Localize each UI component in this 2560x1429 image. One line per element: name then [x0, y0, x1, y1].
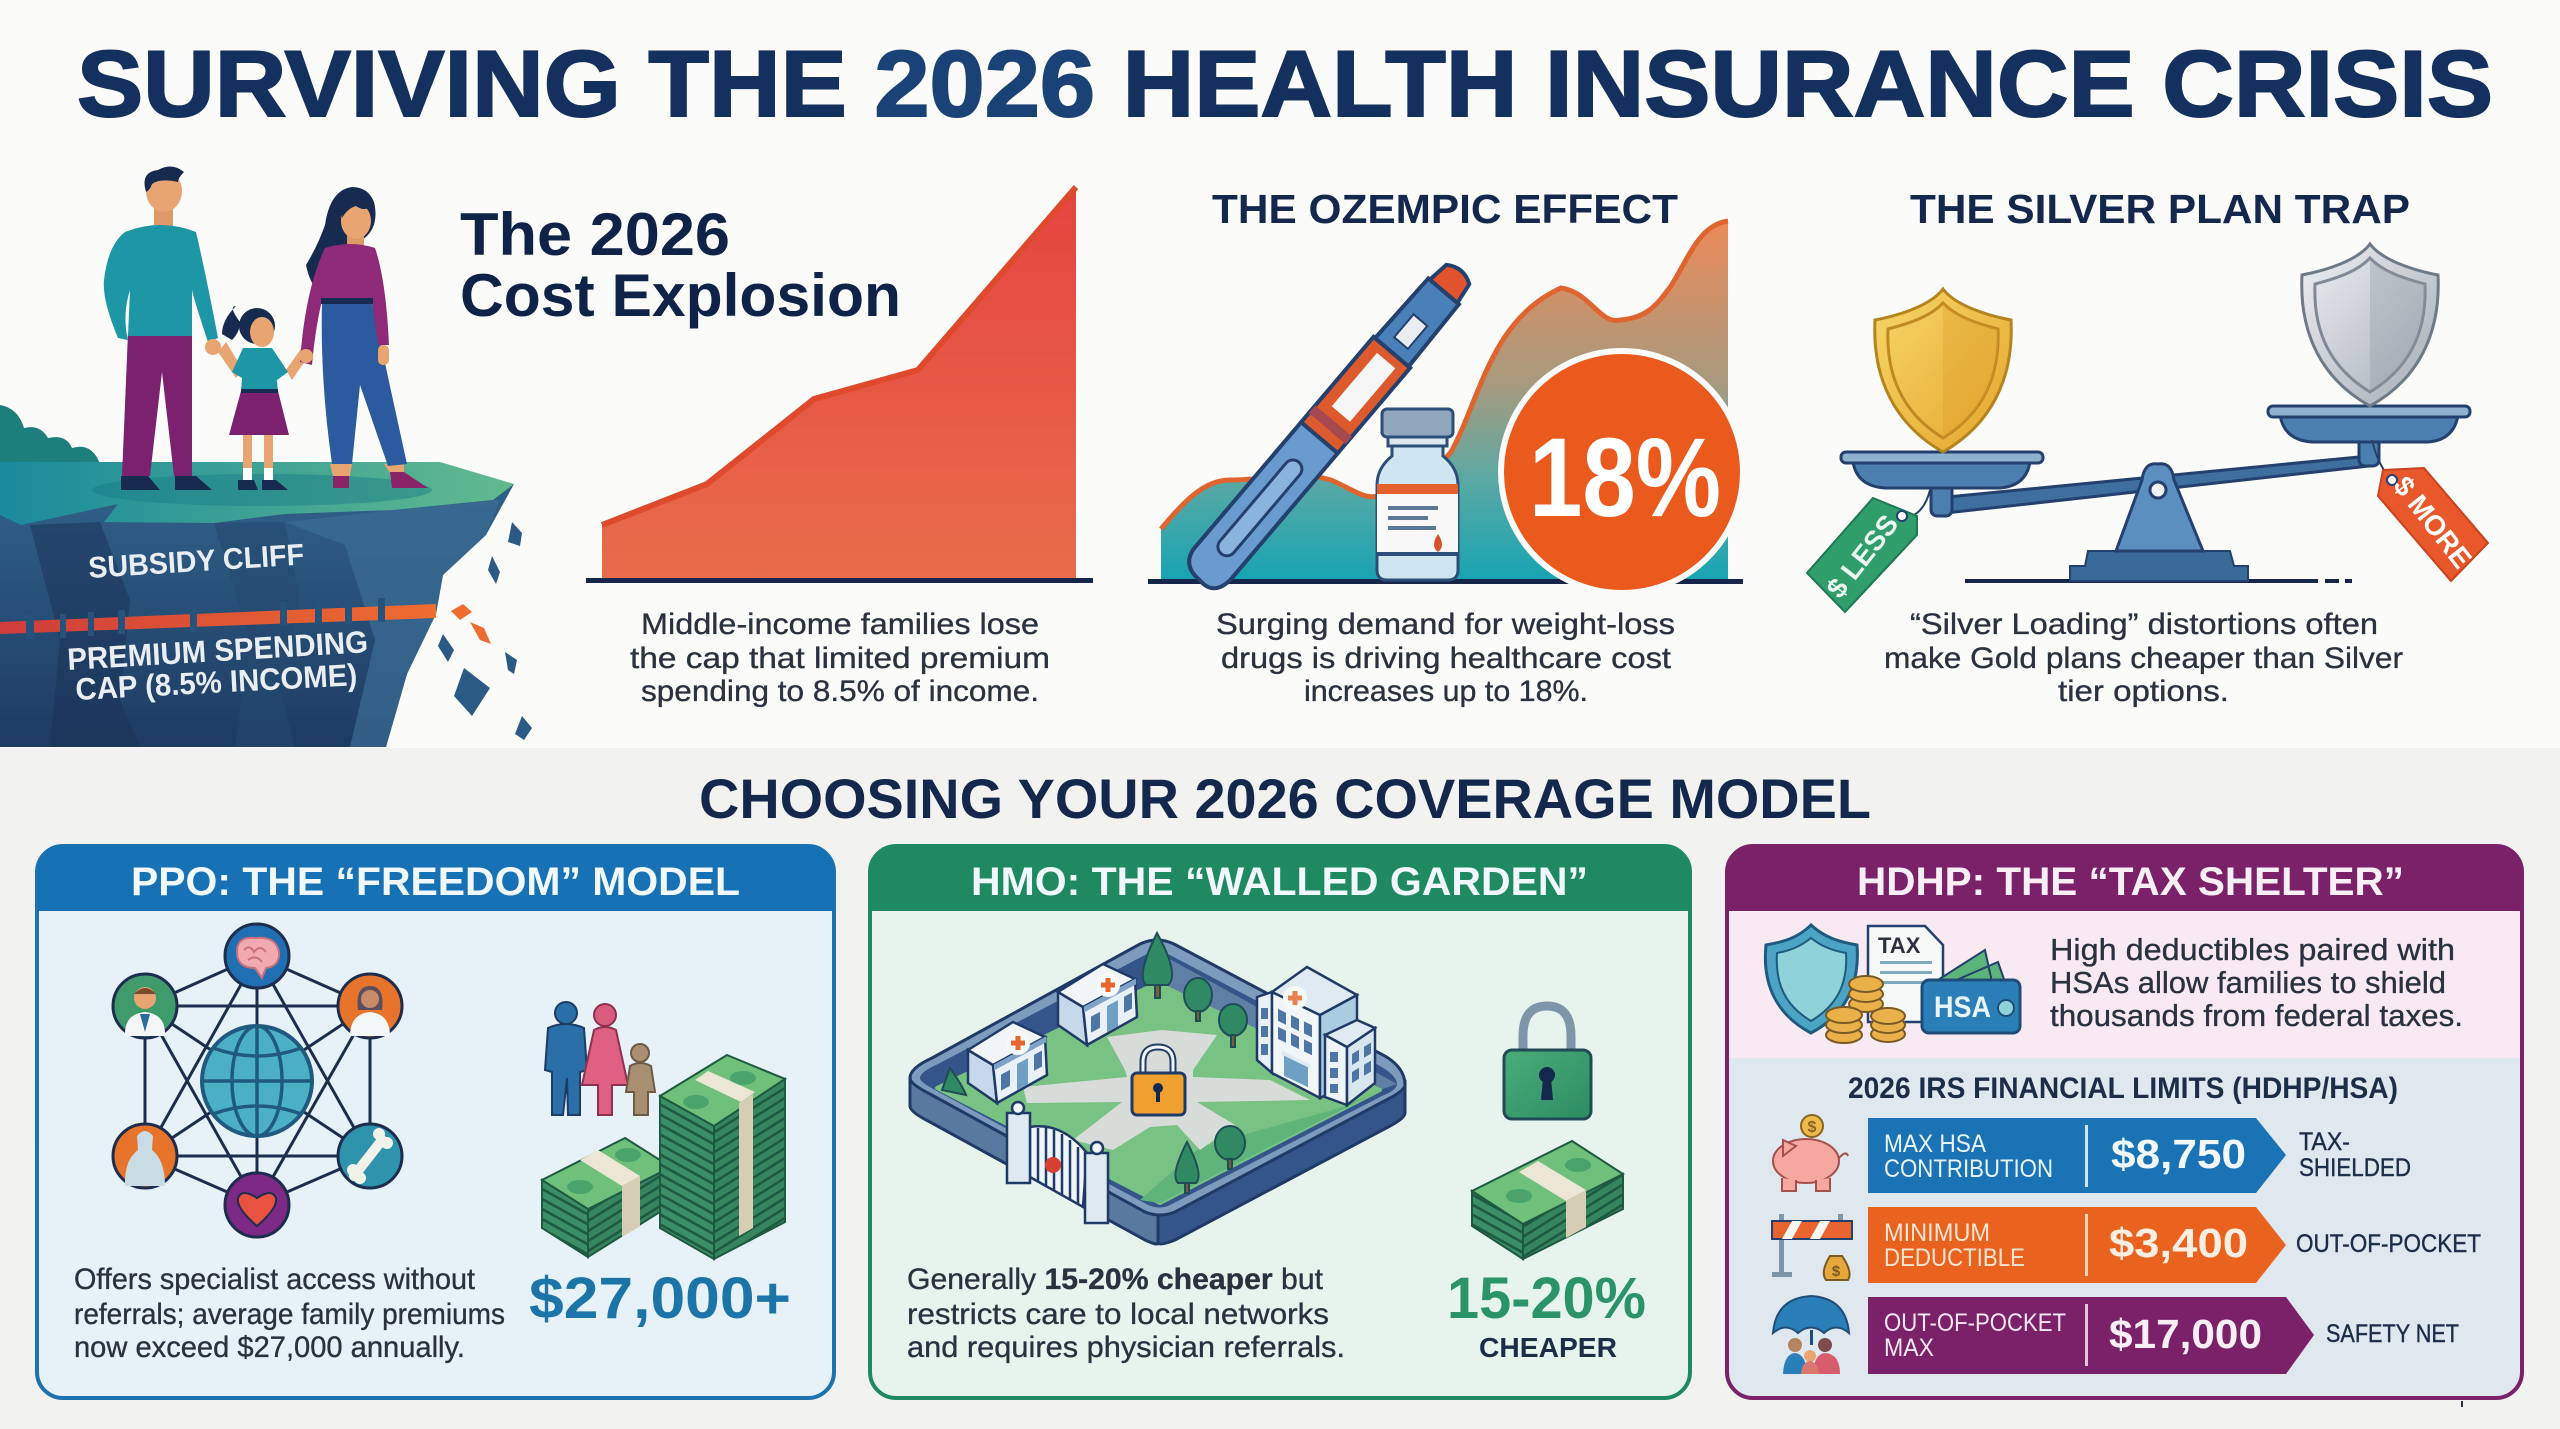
- icon: padlock: [1504, 1006, 1591, 1119]
- icon: cash stacks: [542, 1055, 785, 1259]
- heading: The 2026: [460, 201, 730, 268]
- wall side faces: [910, 1080, 1158, 1244]
- description: drugs is driving healthcare cost: [1221, 642, 1672, 675]
- tag: more: $ MORE: [2387, 470, 2478, 574]
- icon: female doctor: [338, 974, 402, 1038]
- icon: injection pen: [1180, 255, 1479, 596]
- subsidy cliff label: SUBSIDY CLIFF: [87, 538, 305, 585]
- paths: [1023, 1030, 1310, 1150]
- row: max HSA contribution: CONTRIBUTION: [1884, 1155, 2053, 1183]
- section heading: CHOOSING YOUR 2026 COVERAGE MODEL: [699, 767, 1871, 830]
- row: max HSA contribution: MAX HSA: [1884, 1130, 1986, 1158]
- description: [2050, 932, 2463, 1033]
- description: [907, 1263, 1345, 1364]
- gate: [1007, 1102, 1108, 1223]
- tag: more: [2372, 440, 2488, 581]
- description: [630, 608, 1050, 708]
- wall rim: [910, 940, 1405, 1215]
- mother: [299, 187, 428, 488]
- heading: [460, 201, 901, 329]
- tag: less: $ LESS: [1820, 509, 1904, 604]
- row: minimum deductible: MINIMUM: [1884, 1219, 1990, 1247]
- globe: [202, 1026, 312, 1136]
- hospital: [1257, 967, 1375, 1105]
- subheading: 2026 IRS FINANCIAL LIMITS (HDHP/HSA): [1848, 1072, 2398, 1105]
- walled garden illustration: [910, 933, 1405, 1244]
- header: PPO: THE “FREEDOM” MODEL: [131, 860, 740, 904]
- father: [104, 166, 221, 490]
- icon: cash stack: [1472, 1141, 1623, 1259]
- description: Surging demand for weight-loss: [1216, 608, 1675, 641]
- short stack: [542, 1138, 671, 1257]
- header: [1727, 846, 2522, 911]
- icon: piggy bank: [1773, 1115, 1848, 1191]
- description: make Gold plans cheaper than Silver: [1884, 642, 2403, 675]
- premium spending cap label: PREMIUM SPENDING: [66, 624, 369, 677]
- figure: $27,000+: $27,000+: [529, 1266, 791, 1331]
- description: [1884, 608, 2403, 708]
- description: [1216, 608, 1675, 708]
- icon: umbrella over family: [1773, 1296, 1849, 1374]
- illustration: family on subsidy cliff: [0, 166, 532, 747]
- network diagram: [113, 924, 402, 1237]
- icon: silver shield: [2302, 244, 2438, 406]
- area chart: [586, 187, 1093, 583]
- row: max HSA contribution: [1868, 1118, 2411, 1193]
- bottom background: [0, 748, 2560, 1429]
- premium spending cap label: CAP (8.5% INCOME): [75, 657, 358, 707]
- icon: barrier and money bag: $: [1832, 1263, 1841, 1280]
- icon: balance scale: [1807, 244, 2488, 612]
- description: the cap that limited premium: [630, 642, 1050, 675]
- icon: vial: [1377, 409, 1458, 580]
- figure: 15-20% cheaper: [1447, 1266, 1646, 1363]
- description: now exceed $27,000 annually.: [74, 1331, 465, 1364]
- icon: bone: [338, 1124, 402, 1188]
- row: out-of-pocket max: [1868, 1297, 2459, 1374]
- header: HMO: THE “WALLED GARDEN”: [971, 860, 1588, 904]
- row: minimum deductible: DEDUCTIBLE: [1884, 1244, 2025, 1272]
- stray tick mark: [2461, 1401, 2463, 1407]
- header: [37, 846, 834, 911]
- description: [74, 1263, 505, 1364]
- card background: [870, 846, 1690, 1398]
- header: [870, 846, 1690, 911]
- description: High deductibles paired with: [2050, 932, 2455, 967]
- panel: HDHP: [1727, 846, 2522, 1398]
- left pan: [1841, 452, 2043, 516]
- heading: THE SILVER PLAN TRAP: [1910, 186, 2410, 232]
- icon: patient: [113, 1124, 177, 1188]
- description: tier options.: [2058, 675, 2229, 708]
- row: out-of-pocket max: MAX: [1884, 1334, 1934, 1362]
- description: referrals; average family premiums: [74, 1298, 505, 1331]
- description: increases up to 18%.: [1304, 675, 1588, 708]
- panel: the ozempic effect: [1148, 186, 1743, 708]
- bush: [0, 405, 100, 464]
- icon: brain: [225, 924, 289, 988]
- wall inner face: [920, 952, 1397, 1208]
- premium cap dashed line: [0, 598, 436, 639]
- cost curve chart: [1148, 221, 1743, 584]
- card background: [1727, 846, 2522, 1398]
- icon: barrier and money bag: [1772, 1214, 1852, 1280]
- heading: THE OZEMPIC EFFECT: [1212, 186, 1678, 232]
- description: “Silver Loading” distortions often: [1910, 608, 2378, 641]
- icon: heart: [225, 1173, 289, 1237]
- row: minimum deductible: [1868, 1207, 2481, 1283]
- description: Middle-income families lose: [641, 608, 1039, 641]
- panel: HMO: [870, 846, 1690, 1398]
- garden floor: [937, 983, 1380, 1203]
- top background: [0, 0, 2560, 748]
- panel: PPO: [37, 846, 834, 1398]
- row: minimum deductible: OUT-OF-POCKET: [2296, 1230, 2481, 1258]
- row: max HSA contribution: TAX-: [2299, 1128, 2350, 1156]
- row: out-of-pocket max: OUT-OF-POCKET: [1884, 1309, 2066, 1337]
- description: spending to 8.5% of income.: [641, 675, 1039, 708]
- clinic rear: [1058, 964, 1137, 1045]
- tag: less: [1807, 490, 1930, 612]
- lock: [1132, 1047, 1185, 1115]
- cliff rock body: [0, 484, 514, 747]
- tall stack: [660, 1055, 785, 1259]
- card background: [37, 846, 834, 1398]
- description: and requires physician referrals.: [907, 1331, 1345, 1364]
- right pan: [2268, 406, 2470, 466]
- upper band: [1729, 911, 2520, 1058]
- figure: 15-20% cheaper: CHEAPER: [1479, 1332, 1617, 1363]
- ground shadow: [92, 474, 432, 506]
- callout: 18%: [1501, 351, 1743, 593]
- description: thousands from federal taxes.: [2050, 998, 2463, 1033]
- figure: 15-20% cheaper: 15-20%: [1447, 1266, 1646, 1331]
- panel: the silver plan trap: [1807, 186, 2488, 708]
- icon group: shield, tax form, coins, HSA wallet: [1765, 925, 2020, 1043]
- cliff top surface: [0, 462, 514, 525]
- description: restricts care to local networks: [907, 1298, 1329, 1331]
- falling debris: [438, 522, 532, 740]
- trees: [942, 933, 1247, 1193]
- callout: 18%: 18%: [1529, 415, 1721, 540]
- description: HSAs allow families to shield: [2050, 965, 2446, 1000]
- icon group: shield, tax form, coins, HSA wallet: HSA: [1934, 991, 1991, 1024]
- icon: gold shield: [1875, 289, 2011, 452]
- panel: the 2026 cost explosion: [460, 187, 1093, 708]
- header: HDHP: THE “TAX SHELTER”: [1857, 860, 2404, 904]
- heading: Cost Explosion: [460, 262, 901, 329]
- row: max HSA contribution: $8,750: [2111, 1131, 2246, 1177]
- row: max HSA contribution: SHIELDED: [2299, 1154, 2411, 1182]
- title: SURVIVING THE 2026 HEALTH INSURANCE CRISIS: [77, 31, 2493, 136]
- child: [218, 306, 311, 490]
- row: minimum deductible: $3,400: [2109, 1220, 2248, 1266]
- icon group: shield, tax form, coins, HSA wallet: TAX: [1878, 933, 1921, 958]
- clinic left: [968, 1022, 1047, 1103]
- icon: piggy bank: $: [1808, 1119, 1817, 1136]
- icon: family: [545, 1002, 655, 1115]
- description: Generally 15-20% cheaper but: [907, 1263, 1324, 1296]
- row: out-of-pocket max: $17,000: [2109, 1311, 2262, 1357]
- description: Offers specialist access without: [74, 1263, 476, 1296]
- premium spending cap label: [66, 624, 369, 707]
- row: out-of-pocket max: SAFETY NET: [2326, 1320, 2459, 1348]
- icon: male doctor: [113, 974, 177, 1038]
